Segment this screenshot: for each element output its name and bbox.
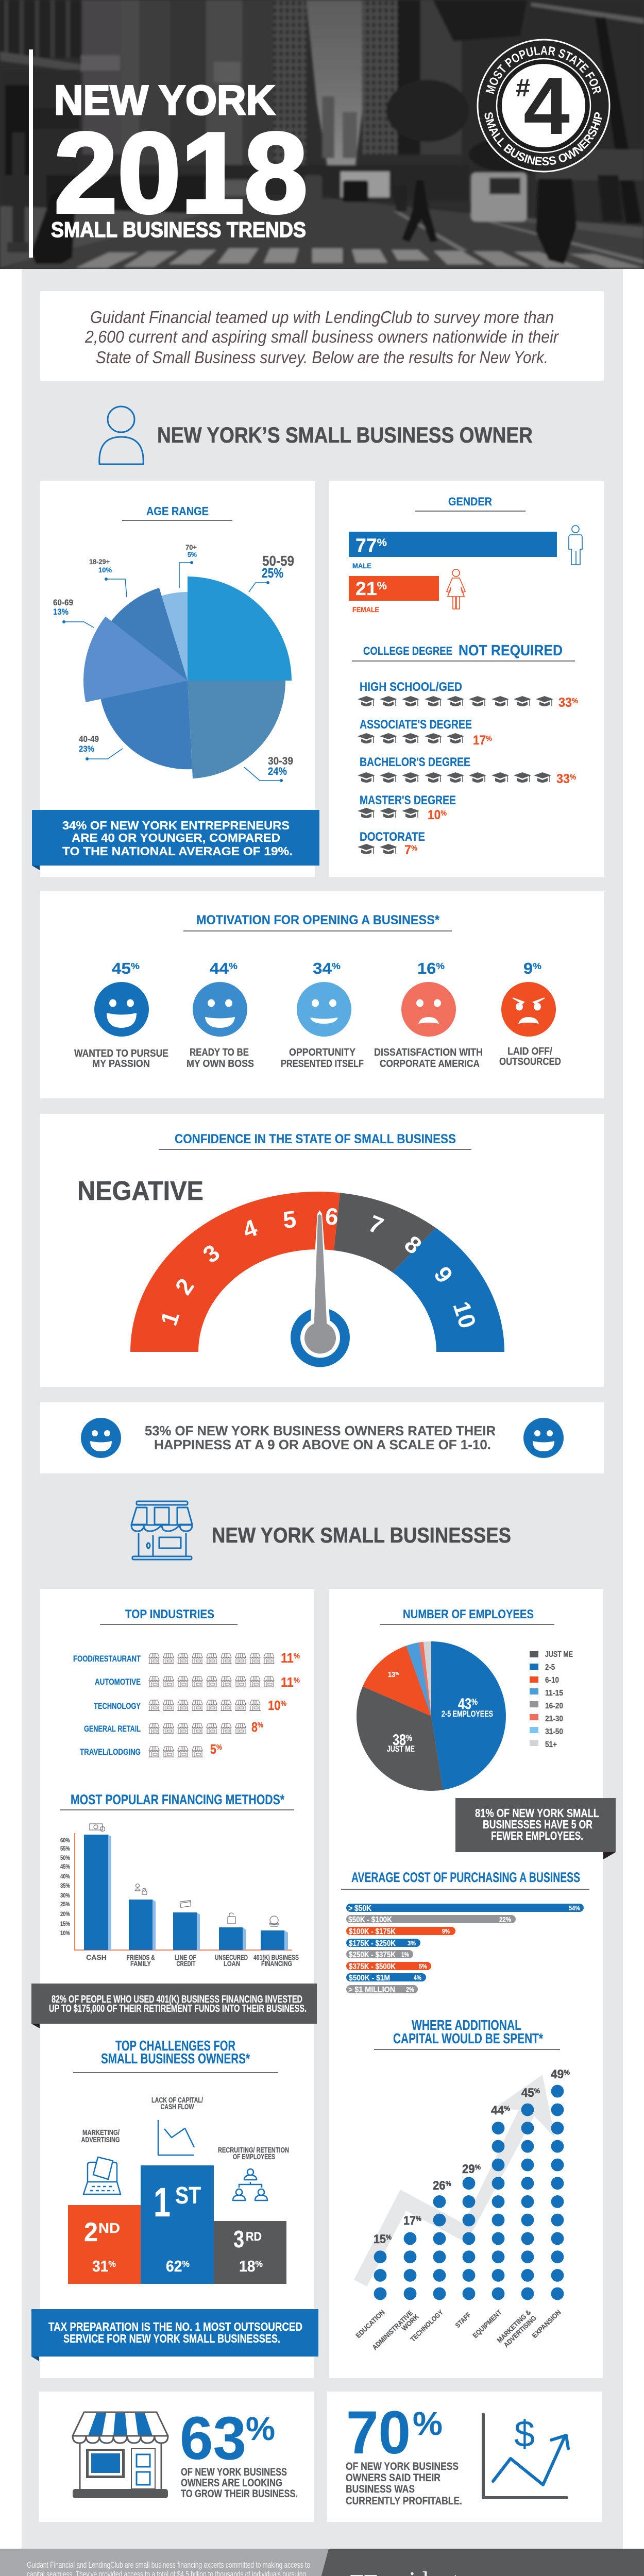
footer text — [27, 2560, 310, 2576]
bar chart: cost of purchasing: 1% — [401, 1951, 409, 1958]
icon: profit chart: $ — [514, 2414, 535, 2455]
bar chart: financing methods: UNSECURED — [215, 1953, 248, 1961]
callout: 81% of businesses — [455, 1798, 616, 1859]
section heading: small businesses: NEW YORK SMALL BUSINESSES — [212, 1523, 511, 1547]
icon: male figure — [569, 526, 582, 565]
bar: female 21%: FEMALE — [352, 605, 379, 614]
hero title block: SMALL BUSINESS TRENDS — [51, 217, 306, 242]
heading: gender: GENDER — [448, 495, 492, 508]
stat: 70%: BUSINESS WAS — [346, 2483, 415, 2495]
dot chart percentages — [374, 2067, 570, 2246]
heading: top challenges: SMALL BUSINESS OWNERS* — [101, 2050, 250, 2066]
bar chart: cost of purchasing: 22% — [499, 1916, 511, 1923]
challenge labels: CASH FLOW — [161, 2103, 194, 2111]
motivation: laid off: % — [533, 961, 541, 971]
pie chart: employees: % — [406, 1733, 412, 1743]
bar chart: financing methods: LINE OF — [175, 1953, 196, 1961]
pie chart: employees: % — [471, 1697, 478, 1707]
stat: 70%: % — [413, 2405, 443, 2442]
icon: declining chart — [158, 2120, 194, 2155]
bar chart: financing methods: FAMILY — [130, 1959, 151, 1968]
heading: age range: AGE RANGE — [146, 504, 209, 518]
bar chart: financing methods: 45% — [60, 1863, 70, 1870]
bar chart: financing methods: 35% — [60, 1882, 70, 1889]
degree: associate's: % — [486, 735, 492, 743]
industry: automotive: AUTOMOTIVE — [95, 1677, 141, 1687]
stat: 70%: CURRENTLY PROFITABLE. — [346, 2495, 462, 2507]
gauge numbers: 8 — [399, 1230, 427, 1259]
bar chart: cost of purchasing: $100K - $175K — [349, 1927, 396, 1936]
degree: master's: 10 — [428, 808, 442, 822]
callout: 34% entrepreneurs: ARE 40 OR YOUNGER, COMPARED — [72, 831, 280, 844]
motivation: opportunity: OPPORTUNITY — [289, 1047, 356, 1058]
gauge numbers: 2 — [170, 1274, 199, 1299]
dot chart percentages: % — [504, 2104, 510, 2112]
industry: technology: 10 — [268, 1698, 283, 1713]
stat: 70% — [346, 2399, 462, 2507]
panel: confidence gauge — [40, 1114, 604, 1387]
badge: #4 most popular state: MOST POPULAR STATE FOR — [485, 46, 601, 95]
text: happiness rating: HAPPINESS AT A 9 OR ABOVE ON A SCALE OF 1-10. — [154, 1437, 491, 1452]
bar chart: financing methods: FRIENDS & — [127, 1953, 155, 1961]
industry: general retail: % — [258, 1721, 263, 1730]
text: happiness rating — [145, 1423, 496, 1452]
pie labels and leader lines: 40-49 — [79, 734, 99, 744]
motivation: opportunity: PRESENTED ITSELF — [281, 1058, 364, 1070]
heading: motivation: MOTIVATION FOR OPENING A BUSINESS* — [196, 913, 439, 927]
industry: automotive — [95, 1674, 300, 1690]
industry: food/restaurant: FOOD/RESTAURANT — [73, 1654, 141, 1664]
challenge labels: RECRUITING/ RETENTION — [218, 2146, 289, 2155]
pie chart: employees: 2-5 EMPLOYEES — [442, 1709, 493, 1719]
bar chart: financing methods: 30% — [60, 1892, 70, 1899]
challenge labels — [81, 2096, 289, 2161]
callout: 34% entrepreneurs — [32, 810, 319, 870]
dot chart percentages: % — [564, 2068, 570, 2076]
panel: motivation — [40, 891, 604, 1098]
degree: doctorate — [358, 830, 425, 857]
degree: high school: 33 — [558, 696, 573, 710]
heading: college degree not required — [352, 642, 575, 661]
bar chart: financing methods — [60, 1833, 299, 1968]
hero title block: NEW YORK — [54, 77, 275, 124]
bar chart: cost of purchasing: $175K - $250K — [349, 1939, 396, 1948]
legend: employees: 11-15 — [545, 1689, 563, 1698]
motivation: own boss: 44 — [210, 959, 227, 977]
heading: top challenges: TOP CHALLENGES FOR — [115, 2038, 235, 2054]
stat: 63%: OF NEW YORK BUSINESS — [181, 2466, 287, 2478]
bar chart: financing methods: 10% — [60, 1929, 70, 1937]
dot chart percentages: 45 — [521, 2086, 535, 2100]
motivation: opportunity: 34 — [313, 959, 330, 977]
legend: employees: 21-30 — [545, 1715, 563, 1723]
pie chart: employees — [357, 1641, 506, 1791]
panel: 70% profitable — [327, 2392, 602, 2522]
motivation: own boss: READY TO BE — [190, 1047, 249, 1058]
degree: associate's: 17 — [473, 733, 487, 748]
degree: bachelor's — [358, 755, 576, 786]
podium: 3rd place: % — [255, 2259, 263, 2269]
degree: high school: HIGH SCHOOL/GED — [360, 680, 462, 694]
industry: technology: TECHNOLOGY — [94, 1701, 141, 1711]
dot chart rotated labels — [354, 2308, 563, 2351]
motivation: laid off: LAID OFF/ — [507, 1046, 552, 1057]
motivation: dissatisfaction: CORPORATE AMERICA — [380, 1058, 480, 1070]
dot chart percentages: 17 — [403, 2214, 417, 2228]
challenge labels: OF EMPLOYEES — [233, 2153, 275, 2161]
bar chart: financing methods: CREDIT — [176, 1959, 196, 1968]
icon: profit chart — [483, 2414, 568, 2498]
dot chart rotated labels: TECHNOLOGY — [409, 2308, 445, 2343]
panel: gender and college degree — [329, 481, 604, 877]
legend: employees: 6-10 — [545, 1676, 559, 1685]
heading: where additional capital — [374, 2017, 560, 2049]
hero photo: New York street — [0, 0, 644, 269]
icon: org chart people — [233, 2169, 267, 2200]
gauge arcs — [130, 1192, 504, 1352]
dot chart percentages: % — [386, 2233, 392, 2241]
dot chart rotated labels: EDUCATION — [354, 2308, 386, 2340]
callout: 401(k) financing: 82% OF PEOPLE WHO USED 401(K) BUSINESS FINANCING INVESTED — [52, 1994, 302, 2005]
pie labels and leader lines: 30-39 — [268, 755, 293, 767]
legend: employees: 2-5 — [545, 1663, 555, 1672]
degree: associate's: ASSOCIATE'S DEGREE — [360, 718, 472, 732]
industry: food/restaurant: % — [294, 1652, 300, 1660]
badge: #4 most popular state: SMALL BUSINESS OWNERSHIP — [484, 112, 602, 166]
pie labels and leader lines: 10% — [98, 566, 112, 574]
motivation: passion: MY PASSION — [92, 1058, 150, 1070]
section heading: small business owner: NEW YORK’S SMALL BUSINESS OWNER — [157, 423, 533, 448]
dot chart: capital use — [374, 2085, 564, 2300]
panel: right column, employees cost capital — [329, 1589, 616, 2378]
bar chart: cost of purchasing: 5% — [419, 1962, 427, 1970]
bar: female 21% — [349, 576, 439, 614]
bar chart: financing methods: 40% — [60, 1873, 70, 1880]
panel: left column, industries financing challenges — [31, 1589, 318, 2378]
panel: 63% grow — [39, 2392, 314, 2522]
motivation: passion — [74, 959, 168, 1070]
bar chart: cost of purchasing: 54% — [569, 1904, 580, 1912]
stat: 63%: 63 — [180, 2404, 246, 2472]
dot chart percentages: % — [416, 2214, 421, 2223]
dot chart rotated labels: ADVERTISING — [502, 2314, 538, 2349]
pie labels and leader lines: 60-69 — [53, 598, 73, 607]
badge: #4 most popular state — [477, 39, 610, 172]
dot chart rotated labels: EXPANSION — [531, 2308, 563, 2340]
pie chart: employees: 43 — [458, 1696, 475, 1713]
motivation: laid off: 9 — [523, 959, 532, 977]
panel: introduction: Guidant Financial teamed up with LendingClub to survey more than — [90, 308, 554, 327]
legend: employees: 31-50 — [545, 1727, 563, 1736]
bar: male 77% — [349, 532, 557, 570]
industry: technology — [94, 1698, 286, 1713]
legend: employees — [530, 1650, 573, 1749]
pie chart: employees: % — [395, 1671, 399, 1676]
pie labels and leader lines: 24% — [268, 766, 287, 777]
dot chart rotated labels: EQUIPMENT — [471, 2308, 503, 2340]
industry: travel/lodging: 5 — [210, 1741, 217, 1757]
panel: introduction: State of Small Business survey. Below are the results for New York. — [96, 348, 548, 367]
industry: food/restaurant: 11 — [281, 1650, 295, 1666]
bar chart: cost of purchasing: 3% — [408, 1939, 416, 1947]
pie chart: employees: JUST ME — [387, 1744, 415, 1754]
gauge numbers: 3 — [198, 1239, 225, 1268]
callout: 81% of businesses: BUSINESSES HAVE 5 OR — [483, 1818, 592, 1831]
bar chart: financing methods: 25% — [60, 1901, 70, 1908]
pie chart: employees: 13 — [388, 1670, 397, 1679]
callout: 81% of businesses: FEWER EMPLOYEES. — [491, 1829, 583, 1842]
stat: 63%: TO GROW THEIR BUSINESS. — [181, 2488, 298, 2500]
footer — [0, 2549, 644, 2576]
gauge numbers: 10 — [448, 1298, 482, 1331]
bar: female 21%: % — [377, 580, 387, 592]
bar chart: financing methods: 55% — [60, 1845, 70, 1852]
dot chart percentages: 26 — [433, 2179, 447, 2193]
challenge labels: MARKETING/ — [82, 2129, 120, 2137]
logo: guidant financial — [350, 2566, 459, 2576]
icon: female figure — [447, 569, 465, 609]
heading: where additional capital: CAPITAL WOULD BE SPENT* — [393, 2030, 543, 2046]
stat: 70%: OWNERS SAID THEIR — [346, 2472, 440, 2484]
panel: age range — [32, 481, 319, 877]
pie labels and leader lines: 13% — [53, 607, 69, 617]
icon: laptop and document — [83, 2157, 121, 2194]
stat: 63% — [180, 2404, 298, 2500]
dot chart percentages: % — [475, 2163, 481, 2171]
hero title block — [29, 49, 308, 258]
pie labels and leader lines — [53, 543, 294, 782]
stat: 70%: 70 — [346, 2399, 411, 2467]
heading: where additional capital: WHERE ADDITIONAL — [412, 2017, 521, 2033]
text: happiness rating: 53% OF NEW YORK BUSINESS OWNERS RATED THEIR — [145, 1423, 496, 1438]
bar: female 21%: 21 — [355, 578, 377, 599]
badge: #4 most popular state: 4 — [523, 61, 570, 151]
icon: happy face right — [523, 1418, 564, 1458]
bar chart: financing methods: 60% — [60, 1837, 70, 1844]
bar: male 77%: % — [377, 536, 387, 549]
icon: storefront — [73, 2412, 168, 2498]
bar chart: cost of purchasing: 9% — [442, 1927, 450, 1935]
bar chart: financing methods: FINANCING — [261, 1959, 292, 1968]
hero title block: 2018 — [54, 109, 308, 237]
motivation: dissatisfaction: % — [436, 961, 445, 971]
dot chart percentages: % — [534, 2087, 540, 2095]
pie labels and leader lines: 23% — [79, 744, 94, 754]
gauge numbers: 7 — [365, 1210, 387, 1240]
dot chart percentages: 15 — [374, 2232, 387, 2246]
callout: tax preparation — [31, 2309, 318, 2361]
gauge numbers: 1 — [155, 1308, 184, 1329]
pie chart: age range — [83, 577, 292, 778]
bar chart: cost of purchasing: $500K - $1M — [349, 1974, 390, 1982]
motivation: passion: WANTED TO PURSUE — [74, 1048, 168, 1059]
challenge labels: LACK OF CAPITAL/ — [151, 2096, 203, 2105]
gauge numbers: 9 — [429, 1262, 459, 1287]
industry: travel/lodging: % — [216, 1743, 222, 1752]
industry: general retail — [84, 1719, 263, 1735]
legend: employees: JUST ME — [545, 1650, 573, 1659]
bar chart: cost of purchasing: 2% — [406, 1986, 414, 1993]
motivation: passion: 45 — [112, 959, 129, 977]
industry: general retail: 8 — [251, 1719, 259, 1735]
heading: confidence: CONFIDENCE IN THE STATE OF SMALL BUSINESS — [175, 1132, 456, 1146]
dot chart percentages: % — [446, 2179, 451, 2188]
callout: tax preparation: TAX PREPARATION IS THE NO. 1 MOST OUTSOURCED — [48, 2320, 302, 2333]
badge: #4 most popular state: # — [516, 75, 530, 102]
podium: 3rd place — [214, 2221, 286, 2284]
industry: technology: % — [281, 1699, 286, 1708]
gauge numbers: 4 — [239, 1214, 261, 1244]
motivation: dissatisfaction: DISSATISFACTION WITH — [374, 1047, 483, 1058]
bar chart: cost of purchasing — [346, 1904, 584, 1994]
callout: 401(k) financing: UP TO $175,000 OF THEIR RETIREMENT FUNDS INTO THEIR BUSINESS. — [49, 2003, 307, 2014]
gauge numbers: 6 — [324, 1202, 340, 1230]
label: negative: NEGATIVE — [77, 1176, 204, 1206]
podium: 1st place: 1 — [154, 2179, 171, 2225]
industry: general retail: GENERAL RETAIL — [84, 1724, 141, 1734]
motivation: own boss: % — [229, 961, 238, 971]
motivation: dissatisfaction — [374, 959, 483, 1070]
degree: associate's — [358, 718, 492, 748]
podium: 2nd place — [68, 2205, 141, 2284]
pie labels and leader lines: 18-29+ — [89, 557, 110, 566]
legend: employees: 16-20 — [545, 1702, 563, 1710]
motivation: dissatisfaction: 16 — [417, 959, 435, 977]
degree: doctorate: DOCTORATE — [360, 830, 425, 844]
bar chart: cost of purchasing: $250K - $375K — [349, 1951, 396, 1959]
degree: bachelor's: 33 — [556, 772, 571, 786]
bar chart: cost of purchasing: > $50K — [348, 1904, 371, 1913]
motivation: opportunity: % — [332, 961, 341, 971]
heading: financing methods: MOST POPULAR FINANCING METHODS* — [71, 1792, 284, 1807]
degree: bachelor's: BACHELOR'S DEGREE — [360, 755, 470, 769]
stat: 63%: % — [246, 2410, 275, 2447]
industry: travel/lodging: TRAVEL/LODGING — [80, 1747, 141, 1757]
pie labels and leader lines: 70+ — [185, 543, 197, 551]
podium: 3rd place: RD — [246, 2230, 262, 2244]
bar chart: financing methods: 401(K) BUSINESS — [253, 1953, 299, 1961]
motivation: own boss — [187, 959, 254, 1070]
dot chart rotated labels: ADMINISTRATIVE — [371, 2309, 414, 2351]
podium: 1st place: 62 — [166, 2257, 183, 2275]
motivation: passion: % — [131, 961, 140, 971]
degree: high school: % — [572, 697, 578, 705]
degree: bachelor's: % — [570, 773, 576, 782]
bar chart: financing methods: 50% — [60, 1854, 70, 1861]
legend: employees: 51+ — [545, 1740, 557, 1749]
pie labels and leader lines: 25% — [262, 565, 283, 581]
chart icons — [90, 1824, 279, 1926]
heading: college degree not required: COLLEGE DEGREE — [363, 645, 452, 657]
podium: 1st place: ST — [175, 2182, 201, 2209]
motivation: laid off: OUTSOURCED — [499, 1056, 561, 1067]
degree: master's: MASTER'S DEGREE — [360, 793, 456, 807]
dot chart rotated labels: MARKETING & — [496, 2308, 532, 2344]
callout: 81% of businesses: 81% OF NEW YORK SMALL — [475, 1806, 599, 1820]
podium: 2nd place: % — [108, 2259, 116, 2269]
degree: doctorate: % — [411, 844, 417, 853]
industry: automotive: % — [294, 1676, 300, 1685]
podium: 1st place: % — [182, 2259, 190, 2269]
bar chart: cost of purchasing: $50K - $100K — [348, 1916, 392, 1924]
industry: travel/lodging — [80, 1741, 222, 1757]
icon: happy face left — [81, 1418, 121, 1458]
footer text: Guidant Financial and LendingClub are small business financing experts committed to making access to — [27, 2560, 310, 2570]
motivation: own boss: MY OWN BOSS — [187, 1058, 254, 1070]
callout: 401(k) financing — [31, 1984, 317, 2028]
degree: doctorate: 7 — [404, 843, 412, 857]
panel: introduction: 2,600 current and aspiring small business owners nationwide in their — [84, 327, 560, 346]
motivation: laid off — [499, 959, 561, 1067]
podium: 3rd place: 3 — [233, 2226, 244, 2252]
callout: 34% entrepreneurs: 34% OF NEW YORK ENTREPRENEURS — [62, 819, 290, 832]
degree: master's — [358, 793, 456, 822]
panel: introduction — [40, 291, 604, 381]
motivation: opportunity — [281, 959, 364, 1070]
podium: 2nd place: 31 — [92, 2257, 110, 2275]
bar chart: financing methods: LOAN — [224, 1959, 240, 1968]
dot chart percentages: 49 — [551, 2067, 565, 2081]
podium: 2nd place: 2 — [84, 2217, 98, 2247]
bar chart: cost of purchasing: 4% — [414, 1974, 421, 1981]
heading: top industries: TOP INDUSTRIES — [125, 1607, 214, 1621]
bar: male 77%: MALE — [352, 562, 371, 570]
industry: automotive: 11 — [281, 1674, 295, 1690]
challenge labels: ADVERTISING — [81, 2136, 120, 2144]
icon: store outline — [131, 1501, 192, 1560]
bar chart: cost of purchasing: > $1 MILLION — [348, 1986, 395, 1994]
callout: 34% entrepreneurs: TO THE NATIONAL AVERAGE OF 19%. — [62, 844, 293, 858]
bar chart: financing methods: 15% — [60, 1920, 70, 1927]
panel: happiness — [40, 1402, 604, 1473]
arrow: background growth arrow — [354, 2075, 555, 2286]
industry: food/restaurant — [73, 1650, 300, 1666]
pie labels and leader lines: 5% — [188, 550, 197, 558]
podium: 1st place — [141, 2165, 214, 2284]
dot chart rotated labels: WORK — [400, 2312, 420, 2332]
gauge numbers — [155, 1202, 482, 1331]
stat: 70%: OF NEW YORK BUSINESS — [346, 2461, 459, 2472]
dot chart percentages: 44 — [491, 2104, 505, 2117]
bar chart: financing methods: CASH — [86, 1953, 107, 1961]
pie labels and leader lines: 50-59 — [262, 553, 294, 569]
icon: person outline — [99, 406, 143, 464]
gauge needle and knob — [291, 1210, 350, 1367]
gauge numbers: 5 — [282, 1206, 297, 1233]
stat: 63%: OWNERS ARE LOOKING — [181, 2477, 282, 2489]
podium: 3rd place: 18 — [239, 2257, 257, 2275]
dot chart percentages: 29 — [462, 2162, 476, 2176]
pie chart: employees: 38 — [393, 1732, 410, 1749]
bar chart: cost of purchasing: $375K - $500K — [349, 1962, 396, 1971]
bar chart: financing methods: 20% — [60, 1910, 70, 1918]
heading: college degree not required: NOT REQUIRED — [459, 642, 563, 659]
dot chart rotated labels: STAFF — [454, 2311, 472, 2329]
heading: number of employees: NUMBER OF EMPLOYEES — [403, 1607, 534, 1621]
podium: 2nd place: ND — [98, 2220, 120, 2236]
bar: male 77%: 77 — [355, 535, 377, 556]
callout: tax preparation: SERVICE FOR NEW YORK SMALL BUSINESSES. — [63, 2332, 280, 2345]
degree: master's: % — [440, 809, 447, 818]
heading: top challenges — [73, 2038, 278, 2073]
degree: high school — [358, 680, 578, 710]
